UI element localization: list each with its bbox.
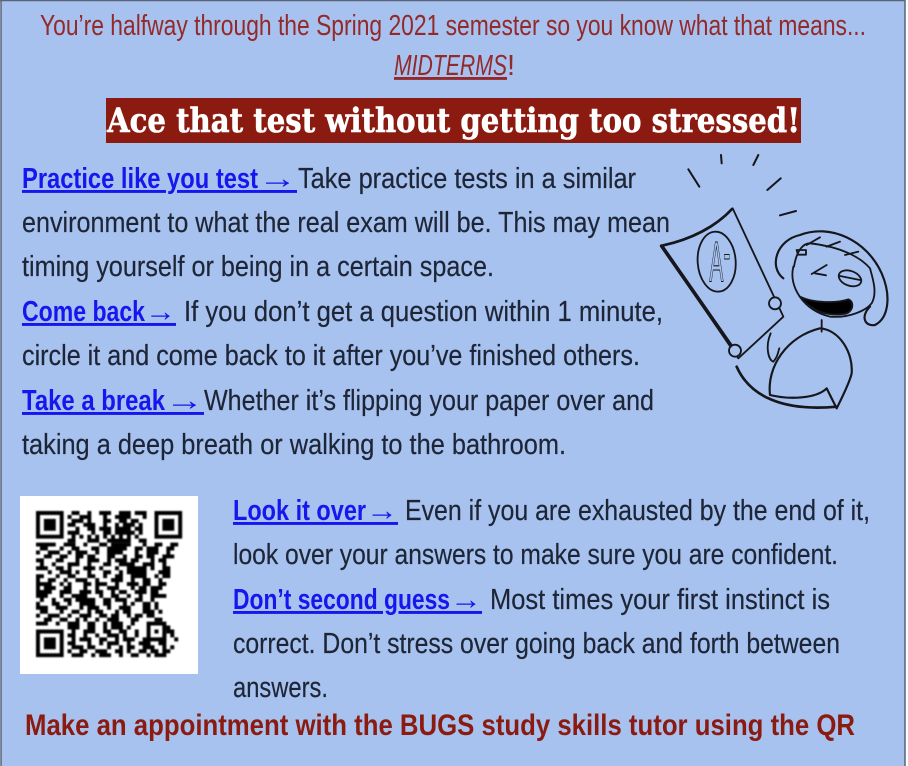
tip: practice like you test: timing yourself or being in a certain space.	[22, 251, 494, 283]
tip: come back: Come back	[22, 296, 146, 328]
tip: practice like you test: Practice like you test	[22, 163, 258, 195]
tip: look it over: Look it over	[233, 495, 366, 527]
tip: practice like you test	[22, 163, 670, 283]
tip: come back: →	[145, 296, 176, 328]
intro text: MIDTERMS	[394, 50, 507, 82]
tip: look it over	[233, 495, 870, 571]
tip: practice like you test: →	[258, 163, 297, 195]
tip: take a break	[22, 385, 654, 461]
tip: come back	[22, 296, 663, 372]
icon: student holding up graded test: A	[709, 231, 723, 295]
tip: take a break: taking a deep breath or walking to the bathroom.	[22, 429, 566, 461]
tip: don't second guess: answers.	[233, 672, 328, 704]
QR code	[20, 496, 198, 674]
icon: student holding up graded test	[662, 155, 887, 408]
intro text: !	[507, 50, 515, 82]
tip: take a break: Whether it’s flipping your paper over and	[204, 385, 654, 417]
tip: take a break: Take a break	[22, 385, 166, 417]
tip: don't second guess	[233, 584, 840, 704]
tip: practice like you test: Take practice tests in a similar	[298, 163, 636, 195]
icon: student holding up graded test: -	[723, 222, 730, 285]
tip: come back: If you don’t get a question within 1 minute,	[184, 296, 663, 328]
tip: don't second guess: Don’t second guess	[233, 584, 450, 616]
tip: look it over: →	[366, 495, 398, 527]
tip: practice like you test: environment to what the real exam will be. This may mean	[22, 207, 670, 239]
intro text	[40, 10, 866, 82]
tip: don't second guess: →	[450, 584, 482, 616]
tip: don't second guess: Most times your first instinct is	[490, 584, 830, 616]
heading banner: Ace that test without getting too stressed!	[106, 101, 800, 141]
tip: come back: circle it and come back to it after you’ve finished others.	[22, 340, 640, 372]
tip: take a break: →	[165, 385, 204, 417]
